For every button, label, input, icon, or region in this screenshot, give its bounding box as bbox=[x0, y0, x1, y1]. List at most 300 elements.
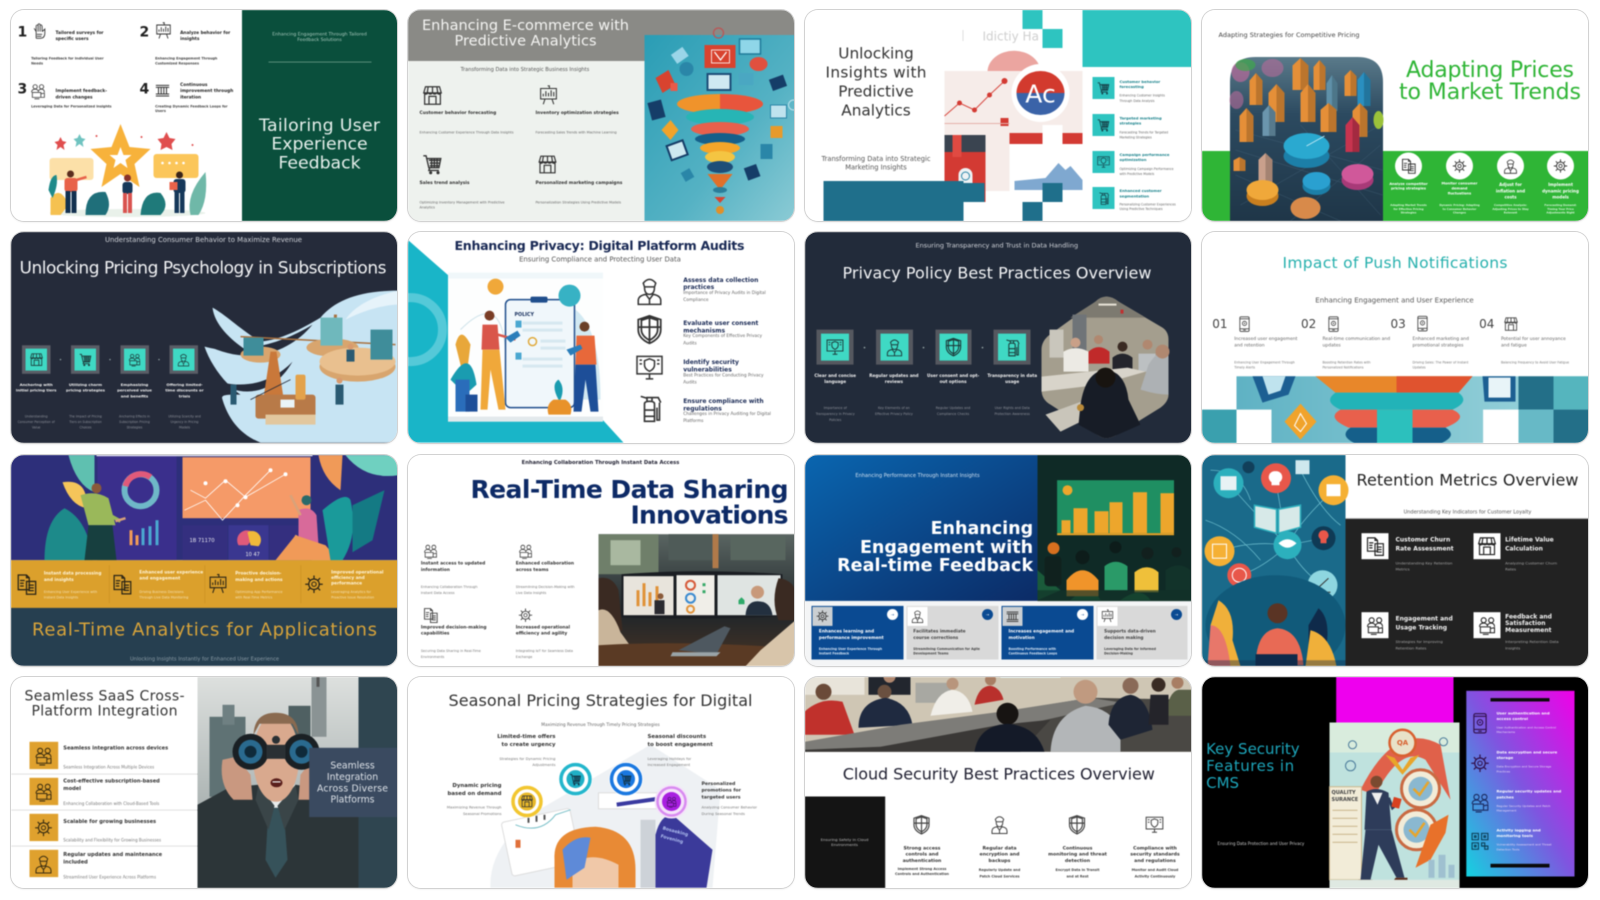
step descriptions: Subscription Pricing bbox=[119, 420, 149, 424]
step descriptions: Consumer Perception of bbox=[17, 420, 55, 424]
pricing labels: pricing strategies bbox=[1391, 187, 1425, 191]
panel: Retention Metrics Overview bbox=[1202, 455, 1588, 666]
title bbox=[1398, 58, 1580, 105]
item: dynamic pricing bbox=[446, 783, 502, 816]
item 4: improvement through bbox=[180, 88, 233, 94]
dark metrics panel: Rates bbox=[1505, 566, 1516, 571]
list: integration benefits: Enhancing Collaboration with Cloud-Based Tools bbox=[63, 801, 159, 806]
step descriptions: Understanding bbox=[24, 415, 47, 419]
illustration: quality assurance walker: QA bbox=[1396, 739, 1408, 747]
list: marketing items: with Predictive Models bbox=[1119, 172, 1154, 176]
item 1: specific users bbox=[55, 36, 88, 42]
gradient panel: security feature list bbox=[1466, 691, 1574, 877]
hero illustration: analytics collage bbox=[944, 30, 1082, 202]
tile 2: Streamlining Communication for Agile bbox=[913, 647, 979, 651]
item 3: Implement feedback- bbox=[55, 88, 107, 94]
practice labels: Transparency in data bbox=[987, 373, 1037, 378]
illustration: feedback stars and people bbox=[48, 124, 206, 217]
item: limited-time offers: Limited-time offers bbox=[497, 734, 555, 740]
numbered item 03: promotional strategies bbox=[1412, 343, 1464, 349]
list: integration benefits: Scalable for growing businesses bbox=[63, 819, 156, 825]
tile 3: → bbox=[1080, 612, 1084, 617]
tile 2: Facilitates immediate bbox=[913, 628, 965, 634]
step labels: initial pricing tiers bbox=[15, 388, 57, 393]
list: marketing items: Campaign performance bbox=[1119, 152, 1169, 157]
green title column: Feedback bbox=[278, 153, 360, 173]
item: decision-making: Improved decision-making bbox=[420, 624, 486, 630]
gradient panel: security feature list: access control bbox=[1496, 716, 1527, 721]
blue hero with title: Enhancing Performance Through Instant Insights bbox=[855, 473, 979, 479]
teal checker blocks bbox=[823, 10, 1192, 221]
panel: Real-Time Analytics for Applications bbox=[10, 455, 396, 666]
practice labels: reviews bbox=[884, 379, 903, 384]
green title column: Experience bbox=[271, 135, 367, 155]
item: instant access bbox=[420, 545, 485, 595]
numbered item 01: Enhancing User Engagement Through bbox=[1234, 361, 1294, 365]
numbered item 04: Balancing Frequency to Avoid User Fatigue bbox=[1500, 361, 1569, 365]
practice: access controls: authentication bbox=[902, 858, 941, 864]
photo: classroom in hexagon bbox=[1041, 297, 1169, 438]
step labels: perceived value bbox=[117, 388, 152, 393]
teal backdrop bbox=[378, 240, 623, 443]
subtitle: Adapting Strategies for Competitive Pricing bbox=[1218, 31, 1359, 39]
practice: encryption: Patch Cloud Services bbox=[979, 875, 1019, 879]
item: seasonal discounts: Seasonal discounts bbox=[647, 734, 706, 740]
numbered item 02 bbox=[1300, 317, 1390, 370]
item 2 bbox=[139, 23, 231, 65]
title: Innovations bbox=[630, 500, 788, 529]
magenta block bbox=[1336, 677, 1453, 723]
item: sales trend analysis: Analytics bbox=[419, 205, 435, 209]
title: Key Security bbox=[1206, 740, 1299, 758]
practice: monitoring: detection bbox=[1064, 858, 1090, 864]
panel: Seamless SaaS Cross-Platform Integration bbox=[10, 677, 396, 888]
audit descriptions: Challenges in Privacy Auditing for Digital bbox=[683, 411, 770, 417]
pricing labels: Adjust for bbox=[1499, 182, 1521, 187]
caption panel: Integration bbox=[326, 772, 378, 783]
item 2: 2 bbox=[139, 24, 149, 40]
dark metrics panel: Satisfaction bbox=[1505, 620, 1545, 627]
item: seasonal discounts: Increased Engagement bbox=[647, 763, 690, 767]
item: limited-time offers: Strategies for Dynamic Pricing bbox=[499, 757, 555, 761]
illustration: dashboards, phone and orange-haired figure: Bosaeking bbox=[661, 826, 688, 838]
title block bbox=[10, 608, 398, 666]
pricing labels: inflation and bbox=[1495, 188, 1525, 194]
illustration: policy document with two people: POLICY bbox=[514, 312, 534, 318]
practice: monitoring: Continuous bbox=[1062, 846, 1092, 852]
green title column: Feedback Solutions bbox=[297, 37, 342, 43]
list: marketing items: Customer behavior bbox=[1119, 79, 1160, 84]
illustration: knowledge network with people bbox=[1200, 454, 1348, 675]
item: decision-making: Securing Data Sharing in Real-Time bbox=[420, 649, 480, 653]
dark metrics panel: Engagement and bbox=[1395, 615, 1452, 622]
title: Cloud Security Best Practices Overview bbox=[842, 765, 1154, 784]
numbered item 03: Enhanced marketing and bbox=[1412, 336, 1469, 342]
item 3: 3 bbox=[17, 82, 27, 98]
banner: funnel and checker blocks bbox=[1201, 377, 1589, 444]
list: marketing items: Enhanced customer bbox=[1119, 188, 1161, 193]
list: integration benefits: Seamless integration across devices bbox=[63, 746, 168, 752]
pricing labels: costs bbox=[1504, 194, 1517, 200]
caption block: Environments bbox=[831, 842, 857, 847]
gold feature band: Improved operational bbox=[331, 569, 384, 575]
item: instant access: Instant Data Access bbox=[420, 591, 454, 595]
dark metrics panel: Insights bbox=[1505, 645, 1520, 650]
pricing descriptions: Adjusting Prices to Stay bbox=[1492, 207, 1528, 211]
green title column: Enhancing Engagement Through Tailored bbox=[272, 32, 366, 38]
photo: audience watching bar chart bbox=[1037, 454, 1192, 601]
numbered item 02: Boosting Retention Rates with bbox=[1322, 361, 1370, 365]
pricing descriptions: Dynamic Pricing: Adapting bbox=[1439, 203, 1479, 207]
panel: Cloud Security Best Practices Overview bbox=[804, 677, 1190, 888]
item 4: 4 bbox=[139, 82, 149, 98]
item: personalized promotions: promotions for bbox=[701, 788, 741, 794]
list: marketing items: optimization bbox=[1119, 157, 1146, 162]
item: personalized promotions: targeted users bbox=[701, 795, 740, 801]
title bbox=[1206, 740, 1299, 792]
item: collaboration: Live Data Insights bbox=[515, 591, 546, 595]
numbered item 01: 01 bbox=[1212, 317, 1227, 331]
pricing descriptions: Strategies bbox=[1400, 211, 1416, 215]
subtitle: Transforming Data into Strategic Business Insights bbox=[459, 67, 589, 73]
list: marketing items: Enhancing Customer Insights bbox=[1119, 94, 1165, 98]
gold feature band: Proactive Issue Resolution bbox=[331, 595, 374, 599]
white icon circles bbox=[1394, 152, 1574, 180]
gold feature band: Instant Data Insights bbox=[43, 595, 78, 599]
pricing labels bbox=[1389, 182, 1578, 200]
panel: Impact of Push Notifications bbox=[1202, 232, 1588, 443]
practice: access controls: controls and bbox=[905, 852, 938, 858]
item: personalized promotions bbox=[701, 781, 757, 816]
item 1: Tailoring Feedback for Individual User bbox=[31, 56, 103, 60]
panel: Tailoring User Experience Feedback bbox=[10, 10, 396, 221]
subtitle: Ensuring Data Protection and User Privacy bbox=[1217, 841, 1304, 846]
numbered item 03: Driving Sales: The Power of Instant bbox=[1412, 361, 1469, 365]
list: marketing items: Through Data Analysis bbox=[1118, 99, 1154, 103]
gradient panel: security feature list: Regular security updates and bbox=[1496, 788, 1561, 793]
item 4: Creating Dynamic Feedback Loops for bbox=[155, 104, 227, 108]
gold feature band: making and actions bbox=[235, 577, 283, 583]
tile 2: course corrections bbox=[913, 635, 958, 641]
illustration: dashboards, phone and orange-haired figure: Fovening bbox=[659, 834, 683, 845]
tile 4: Decision-Making bbox=[1104, 651, 1132, 655]
title: Features in bbox=[1206, 757, 1294, 775]
item 1: Tailored surveys for bbox=[55, 30, 104, 36]
dark metrics panel: Interpreting Retention Data bbox=[1505, 639, 1559, 644]
audit descriptions: Key Components of Effective Privacy bbox=[683, 333, 762, 339]
practice: encryption: Regularly Update and bbox=[978, 868, 1020, 872]
hero illustration: analytics collage: Idictiy Ha bbox=[982, 30, 1038, 44]
dark metrics panel: Measurement bbox=[1505, 627, 1551, 634]
gradient panel: security feature list: Data encryption and secure bbox=[1496, 749, 1557, 754]
item: instant access: Instant access to updated bbox=[420, 560, 485, 566]
subtitle: Marketing Insights bbox=[845, 164, 907, 172]
step labels: Emphasizing bbox=[120, 382, 148, 387]
photo: businessman with binoculars bbox=[197, 677, 359, 889]
item: efficiency: Increased operational bbox=[515, 624, 570, 630]
gradient panel: security feature list: storage bbox=[1496, 755, 1513, 760]
title: Retention Metrics Overview bbox=[1356, 470, 1578, 489]
gold feature band bbox=[10, 560, 398, 608]
practice: access controls: Controls and Authentication bbox=[895, 872, 949, 876]
tile 4: → bbox=[1174, 612, 1178, 617]
gradient panel: security feature list: monitoring tools bbox=[1496, 833, 1533, 838]
panel: Enhancing E-commerce with Predictive Analytics bbox=[408, 10, 794, 221]
audit descriptions: Importance of Privacy Audits in Digital bbox=[683, 290, 765, 296]
numbered item 03 bbox=[1390, 317, 1469, 370]
practice descriptions: Key Elements of an bbox=[878, 406, 909, 410]
panel: Adapting Prices to Market Trends bbox=[1202, 10, 1588, 221]
item: instant access: information bbox=[420, 567, 449, 573]
item 4: iteration bbox=[180, 94, 201, 100]
item: decision-making: Environments bbox=[420, 655, 444, 659]
tile 1 bbox=[811, 606, 903, 659]
audit headings: Identify security bbox=[683, 359, 738, 366]
panel: Privacy Policy Best Practices Overview bbox=[804, 232, 1190, 443]
panel: Enhancing Engagement with Real-time Feedback bbox=[804, 455, 1190, 666]
practice: compliance: Activity Continuously bbox=[1134, 875, 1176, 879]
blue hero with title: Engagement with bbox=[859, 538, 1033, 558]
caption block: Ensuring Safety in Cloud bbox=[820, 837, 868, 842]
left person bbox=[66, 170, 74, 178]
step descriptions: Tiers on Subscription bbox=[68, 420, 101, 424]
step labels: trials bbox=[178, 394, 190, 399]
title band bbox=[407, 10, 795, 61]
item: sales trend analysis: Sales trend analysis bbox=[419, 180, 469, 186]
pricing descriptions: Relevant bbox=[1503, 211, 1517, 215]
practice descriptions: Regular Updates and bbox=[935, 406, 970, 410]
dark metrics panel: Strategies for Improving bbox=[1395, 639, 1443, 644]
illustration: quality assurance walker bbox=[1329, 723, 1459, 889]
title: Privacy Policy Best Practices Overview bbox=[842, 264, 1151, 283]
title: Seamless SaaS Cross- bbox=[24, 689, 184, 705]
panel: Unlocking Pricing Psychology in Subscriptions bbox=[10, 232, 396, 443]
illustration: marketing funnel bbox=[644, 28, 798, 221]
audit headings: practices bbox=[683, 284, 714, 291]
tile 4: Leveraging Data for Informed bbox=[1104, 647, 1155, 651]
list: integration benefits bbox=[10, 742, 197, 880]
tile 2: Development Teams bbox=[913, 651, 948, 655]
audit descriptions: Compliance bbox=[683, 297, 708, 303]
numbered item 03: 03 bbox=[1390, 317, 1405, 331]
practice descriptions: Importance of bbox=[823, 406, 847, 410]
practice descriptions: Compliance Checks bbox=[936, 412, 969, 416]
dark side column bbox=[358, 677, 398, 889]
practice labels: out options bbox=[939, 379, 967, 384]
item: limited-time offers: to create urgency bbox=[501, 742, 555, 748]
numbered item 02: Real-time communication and bbox=[1322, 336, 1390, 342]
pricing labels: models bbox=[1552, 194, 1569, 200]
step labels: time discounts or bbox=[165, 388, 203, 393]
subtitle: Understanding Key Indicators for Customer Loyalty bbox=[1403, 509, 1531, 515]
tile 4: Supports data-driven bbox=[1104, 628, 1155, 634]
list: integration benefits: Seamless Integration Across Multiple Devices bbox=[63, 764, 154, 769]
blue hero with title: Real-time Feedback bbox=[837, 556, 1033, 576]
practice: encryption: encryption and bbox=[979, 852, 1019, 858]
practice: compliance: and regulations bbox=[1134, 858, 1176, 864]
title bbox=[825, 44, 926, 119]
practice: encryption: Regular data bbox=[982, 846, 1016, 852]
gold feature band: Optimizing App Performance bbox=[235, 590, 282, 594]
tile 3: Increases engagement and bbox=[1008, 628, 1074, 634]
item: dynamic pricing: Maximizing Revenue Through bbox=[446, 806, 502, 810]
item: efficiency: efficiency and agility bbox=[515, 630, 567, 636]
item: dynamic pricing: Seasonal Promotions bbox=[462, 812, 501, 816]
item: personalized promotions: During Seasonal Trends bbox=[701, 812, 744, 816]
caption panel: Platforms bbox=[330, 794, 374, 805]
pricing descriptions: Competitive Analysis: bbox=[1494, 203, 1526, 207]
right person bbox=[176, 172, 182, 178]
title block: Unlocking Insights Instantly for Enhanced User Experience bbox=[129, 656, 279, 662]
green title column bbox=[242, 10, 398, 221]
subtitle: Maximizing Revenue Through Timely Pricing Strategies bbox=[541, 722, 660, 728]
gradient panel: security feature list: Management bbox=[1496, 809, 1517, 813]
title bbox=[24, 689, 184, 720]
numbered item 01: Increased user engagement bbox=[1234, 336, 1297, 342]
item: sales trend analysis bbox=[419, 156, 504, 209]
list: marketing items: Personalizing Customer Experiences bbox=[1119, 202, 1176, 206]
item: sales trend analysis: Optimizing Inventory Management with Predictive bbox=[419, 200, 504, 204]
audit descriptions bbox=[683, 290, 770, 424]
item: dynamic pricing: based on demand bbox=[447, 791, 501, 797]
step labels: Anchoring with bbox=[19, 382, 53, 387]
title bbox=[470, 475, 788, 529]
practice: monitoring: and at Rest bbox=[1066, 875, 1088, 879]
list: marketing items bbox=[1082, 67, 1192, 221]
item 2: insights bbox=[180, 36, 199, 42]
panel: Key Security Features in CMS bbox=[1202, 677, 1588, 888]
dark metrics panel: Metrics bbox=[1395, 566, 1409, 571]
step labels bbox=[15, 382, 203, 399]
ring icons bbox=[510, 762, 688, 819]
audit headings: regulations bbox=[683, 406, 722, 413]
practice: monitoring: monitoring and threat bbox=[1048, 852, 1107, 858]
gold feature band: with Real-Time Metrics bbox=[235, 595, 272, 599]
item: customer behavior forecasting: Enhancing Customer Experience Through Data Insights bbox=[419, 131, 513, 135]
title: Seasonal Pricing Strategies for Digital bbox=[448, 691, 752, 710]
numbered item 02: 02 bbox=[1300, 317, 1316, 331]
title: Adapting Prices bbox=[1406, 58, 1574, 83]
item 3 bbox=[17, 82, 111, 108]
numbered item 04: Potential for user annoyance bbox=[1500, 336, 1565, 342]
gold feature band: Driving Business Decisions bbox=[139, 590, 183, 594]
item: seasonal discounts bbox=[647, 734, 713, 767]
step descriptions bbox=[17, 415, 200, 430]
item: efficiency: Integrating IoT for Seamless Data bbox=[515, 649, 572, 653]
title: Insights with bbox=[825, 63, 926, 81]
gradient panel: security feature list: patches bbox=[1496, 794, 1514, 799]
title: Impact of Push Notifications bbox=[1282, 254, 1507, 272]
pricing descriptions: Timing Your Price bbox=[1547, 207, 1573, 211]
gradient panel: security feature list: User Authentication and Access Control bbox=[1496, 726, 1556, 730]
dark metrics panel: Customer Churn bbox=[1395, 536, 1450, 543]
caption panel: Seamless bbox=[330, 760, 374, 771]
green title column: Tailoring User bbox=[258, 116, 380, 136]
title: Enhancing Privacy: Digital Platform Audits bbox=[454, 238, 744, 253]
step descriptions: Choices bbox=[79, 426, 91, 430]
item: efficiency bbox=[515, 608, 572, 659]
list: marketing items: Optimizing Campaign Performance bbox=[1119, 167, 1173, 171]
item 4 bbox=[139, 82, 233, 113]
practice icons bbox=[816, 330, 1030, 365]
dark metrics panel: Lifetime Value bbox=[1505, 536, 1553, 543]
list: integration benefits: Streamlined User Experience Across Platforms bbox=[63, 875, 156, 880]
illustration: pricing scales swoosh bbox=[204, 291, 398, 443]
subtitle: Enhancing Collaboration Through Instant Data Access bbox=[521, 460, 679, 466]
pricing labels: Implement bbox=[1548, 182, 1572, 187]
item: collaboration: Streamlining Decision-Making with bbox=[515, 585, 574, 589]
photo: video meeting bbox=[598, 534, 795, 666]
list: marketing items: Forecasting Trends for Targeted bbox=[1119, 130, 1168, 134]
numbered item 04 bbox=[1479, 317, 1569, 365]
title: CMS bbox=[1206, 774, 1239, 792]
practice descriptions: Effective Privacy Policy bbox=[874, 412, 912, 416]
item: decision-making: capabilities bbox=[420, 630, 449, 636]
panel: Real-Time Data Sharing Innovations bbox=[408, 455, 794, 666]
practice labels: usage bbox=[1005, 379, 1019, 384]
gold feature band: Enhanced user experience bbox=[139, 569, 203, 575]
practice: compliance: Compliance with bbox=[1133, 846, 1176, 852]
step labels: Offering limited- bbox=[166, 382, 202, 387]
dark metrics panel: Retention Rates bbox=[1395, 645, 1426, 650]
item: limited-time offers: Adjustments bbox=[532, 763, 555, 767]
item 3: driven changes bbox=[55, 94, 92, 100]
illustration: policy document with two people bbox=[448, 273, 602, 422]
tile 3: Boosting Performance with bbox=[1008, 647, 1056, 651]
tile 1: Enhances learning and bbox=[818, 628, 874, 634]
pricing labels: fluctuations bbox=[1447, 191, 1471, 195]
tile 1: performance improvement bbox=[818, 635, 883, 641]
list: integration benefits: Regular updates and maintenance bbox=[63, 852, 162, 858]
blue hero with title: Enhancing bbox=[930, 519, 1033, 539]
tile 3: motivation bbox=[1008, 635, 1034, 641]
practice: access controls: Implement Strong Access bbox=[897, 867, 946, 871]
item: personalized marketing bbox=[535, 156, 622, 204]
subtitle: Ensuring Compliance and Protecting User Data bbox=[519, 256, 680, 264]
audit headings: Assess data collection bbox=[683, 277, 758, 284]
tile 2 bbox=[906, 606, 998, 659]
list: integration benefits: model bbox=[63, 786, 81, 792]
item: inventory optimization bbox=[535, 86, 619, 135]
gradient panel: security feature list: Vulnerability Assessment and Threat bbox=[1496, 843, 1552, 847]
illustration: quality assurance walker: QUALITY bbox=[1331, 790, 1355, 796]
item: personalized promotions: Personalized bbox=[701, 781, 735, 787]
audit icons bbox=[636, 280, 662, 422]
practice labels: Regular updates and bbox=[869, 373, 918, 378]
gradient panel: security feature list: Data Encryption and Secure Storage bbox=[1496, 765, 1551, 769]
item 4: Users bbox=[155, 109, 165, 113]
dark metrics panel: Understanding Key Retention bbox=[1395, 560, 1452, 565]
audit headings: vulnerabilities bbox=[683, 367, 732, 374]
audit headings: Ensure compliance with bbox=[683, 398, 763, 405]
title band: Predictive Analytics bbox=[454, 34, 596, 50]
gradient panel: security feature list: Activity logging and bbox=[1496, 827, 1540, 832]
pricing descriptions: for Effective Pricing bbox=[1393, 207, 1423, 211]
pricing labels: demand bbox=[1451, 186, 1467, 190]
caption panel: Across Diverse bbox=[316, 783, 388, 794]
item 2: Customized Responses bbox=[155, 61, 198, 65]
numbered item 01 bbox=[1212, 317, 1297, 370]
tile 3: Continuous Feedback Loops bbox=[1008, 651, 1057, 655]
practice: monitoring bbox=[1048, 816, 1107, 879]
numbered item 01: Timely Alerts bbox=[1233, 366, 1255, 370]
subtitle: Enhancing Engagement and User Experience bbox=[1315, 297, 1473, 305]
practice descriptions bbox=[814, 406, 1030, 422]
illustration: dashboards, phone and orange-haired figure bbox=[490, 745, 720, 888]
practice: compliance: security standards bbox=[1130, 852, 1179, 858]
numbered item 02: Personalized Notifications bbox=[1322, 366, 1363, 370]
item: personalized promotions: Analyzing Consumer Behavior bbox=[701, 806, 757, 810]
